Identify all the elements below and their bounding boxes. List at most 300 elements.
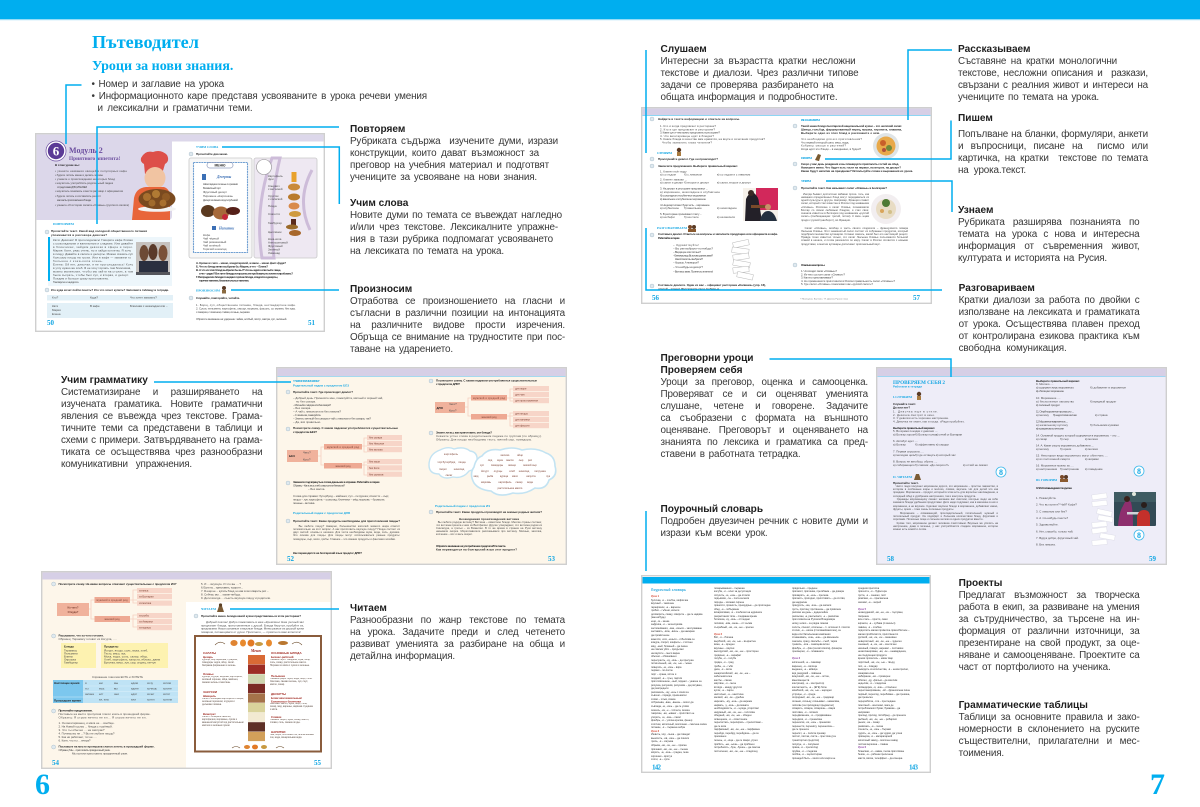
- conjugation table: они: [114, 692, 119, 696]
- grammar diagram ИЗ: [57, 588, 172, 630]
- conjugation table: хочешь: [147, 686, 157, 690]
- exercise 20: Составьте диалог. Ответьте на вопросы и заполните продукцию или официанта в кафе.: [658, 232, 778, 236]
- dictionary column 3: пронадей быть – много или карта не: [792, 757, 835, 760]
- exercise 25: 3. Как его приготавливают?: [801, 276, 833, 280]
- yellow notes: Булочка, мясо, лук, сыр, огурец, кетчуп: [104, 660, 156, 664]
- exercise 25: 1. Что входит салат «Оливье»?: [801, 269, 837, 273]
- body: Преговорни уроци: Уроци за преговор, оценка и самооценка.: [660, 377, 868, 388]
- exercise: last: Поставьте на место пропусков глагол хотеть в прошедшей форме.: [58, 744, 155, 748]
- menu card: desserts and drinks: Десерты: [216, 175, 232, 179]
- section: Повторяем: упоминается в разговоре девочек?: [51, 233, 107, 237]
- conjugation table: едим: [131, 681, 138, 685]
- dictionary column 4: [858, 586, 920, 762]
- menu card: desserts and drinks: Кофе: [203, 233, 211, 237]
- dictionary column 4: начиный, поверх, нарежат – поставяш: [858, 647, 903, 650]
- arrow: Поурочный словарь connector: [645, 511, 647, 571]
- word clouds: йогурт: [481, 469, 490, 473]
- grammar diagram БЕЗ: БЕЗ: [289, 454, 295, 458]
- body: Учим слова: Новите думи по темата се въвеждат нагледно: [350, 210, 562, 221]
- body: Учим слова: на лексиката по темата на урока.: [350, 246, 504, 257]
- dictionary column 3: чипсове (за приходящи предметно): [792, 704, 834, 707]
- dictionary column 2: нарвать, -у, -ёшь – да мината: [714, 704, 749, 707]
- word clouds: капуста: [526, 475, 536, 478]
- body: Произносим: на различните видове прости изречения.: [350, 320, 565, 331]
- multiple choice questions: 9. Молоко ....: [1036, 382, 1054, 386]
- exercise 17: Найдите в тексте информацию и ответьте на вопросы.: [658, 117, 740, 121]
- dictionary column 4: прелюд, приход, пятибрыд – да пренеса: [858, 714, 906, 717]
- yellow notes: Йогурт, ягоды, соль, мука, хлеб,: [104, 648, 148, 652]
- listening questions: 8. Вопрос не автобусу, обрить ....: [893, 460, 938, 464]
- body: Учим грамматику: Систематизиране и разширяването на: [61, 387, 262, 398]
- arrow: Повторяем connector: [96, 126, 339, 224]
- dictionary column 1: вкусный – тамошен: [651, 602, 674, 605]
- page number 6: 6: [35, 768, 50, 801]
- body: Читаем: Разнообразни по жанр текстове по темата: [350, 615, 565, 626]
- exercises 18-19: б) ванильное: [684, 206, 702, 210]
- page number 55: 55: [314, 759, 322, 767]
- text block: Рассказываем: [958, 44, 1148, 103]
- exercise 20: Какой салат вы выбрали?: [675, 257, 703, 261]
- dictionary column 4: примерка, -и – магарагарний: [858, 735, 892, 738]
- conjugation table: [53, 675, 178, 703]
- heading: Проверяем себя 2: Работаем в тетради: [893, 384, 922, 388]
- closing question: Как переводится на болгарский язык предлог ДЛЯ?: [293, 551, 362, 555]
- exercises 18-19: б) на счете: [684, 215, 699, 219]
- multiple choice questions: 14. А. Какие спорту мороженого добавляли ....: [1036, 444, 1094, 448]
- exercises 18-19: а) мороженое, шоколадное и клубничное: [660, 190, 720, 194]
- continued sentences: 5. И ... вкусную. И что вы ... ?: [201, 582, 241, 586]
- dictionary column 1: да промитнеше: [651, 634, 669, 637]
- grammar diagram БЕЗ: [287, 435, 402, 477]
- heading: Преговорни уроци / Проверяем себя: Преговорни уроци: [660, 353, 754, 364]
- exercise 4: Слушайте, повторяйте, читайте.: [196, 296, 240, 300]
- page number 59: 59: [1149, 555, 1156, 563]
- body: Слушаем: общата информация и подробностите.: [660, 92, 838, 103]
- page number 143: 143: [909, 764, 918, 772]
- exercise questions: В. А что из этих блюд выбрали бы вы? Что вы едите или пьёте чаще,: [196, 268, 281, 272]
- body: Слушаем: Интересни за възрастта кратки несложни: [660, 56, 856, 67]
- heading: Учим слова: Учим слова: [350, 198, 408, 209]
- exercise 1 dialogue: – С лимоном, пожалуйста.: [293, 413, 321, 417]
- dictionary column 3: кипяченой, -а – самовар: [792, 661, 821, 664]
- dictionary column 4: незапланирован, -ая, -ое – неаварденка,: [858, 650, 906, 653]
- dictionary column 4: пуста, -и – снежно, пост: [858, 594, 886, 597]
- exercises 18-19: Закончите предложения. Выберите правильный вариант.: [658, 164, 738, 168]
- menu right column: Сметана: масло, мука, яйцо, соль, сахар, мёд, варенье, варёная сгущёнка и мята.: [270, 703, 313, 711]
- dictionary column 4: да прекъсна: [858, 696, 873, 699]
- dictionary column 4: чёрствый, -ая, -ое, -ые – твърд: [858, 661, 895, 664]
- heading: Читаем: Читаем: [350, 603, 387, 614]
- dictionary column 3: прижарить, -ю, -ешь – препека: [792, 594, 828, 597]
- conjugation table: едят: [131, 692, 138, 696]
- yellow notes: Гамбургер: [64, 660, 78, 664]
- conjugation table: хотели: [163, 698, 172, 702]
- menu right column: Бизнес-рабочий: [271, 655, 294, 659]
- menu card: fast food: Кока-кола: [268, 237, 282, 241]
- closing questions: [436, 544, 517, 552]
- body: Проекты: работа в екип, за развиване на умения: [959, 602, 1140, 613]
- grammar diagram ИЗ: из молока: [139, 602, 152, 605]
- menu card: desserts and drinks: МЕНЮ: [214, 164, 226, 168]
- exercise 25: Ответьте на вопросы.: [801, 263, 825, 267]
- body: Узнаем: темата на урока с нова и интересна: [958, 229, 1140, 240]
- exercise 22: Шепца, гольбца, фаршированный перец, мусака, тиропита, плавина,: [801, 128, 902, 132]
- dialogue box: большую пиццу на троих. Или в кафе — закажем то: [53, 256, 131, 260]
- dictionary column 4: снежный, -а, -ие, -ая – мъгличан: [858, 643, 896, 646]
- info box bullets: [55, 163, 129, 207]
- exercise 17: 2. Кто и где предлагает в ресторане?: [660, 127, 715, 131]
- exercise 20: Работайте в парах.: [658, 236, 680, 240]
- dictionary column 4: кирасон, -а – хубава (с мазнъл): [858, 622, 895, 625]
- dictionary column 2: Урок 2: [714, 633, 722, 636]
- word clouds: [429, 448, 556, 495]
- dictionary column 2: преминеш: [714, 735, 726, 738]
- dictionary column 1: Ишвить, хор, -льша – да поведат: [651, 733, 690, 736]
- menu left column: Салат с отварной свёклой, картофелем, морковью, луком и квашеной капустой под растительным маслом и зелёным луком.: [202, 716, 243, 726]
- yellow notes: Тирамису: [64, 648, 78, 652]
- dictionary column 4: напрямая: [858, 711, 870, 714]
- exercise 20: – Входящие или тёплые?: [673, 250, 701, 254]
- info box bullets: • узнаёте названия овощей и популярных кафе: [55, 169, 127, 173]
- listening questions: б) Болгар полюс: [915, 432, 938, 436]
- arrow: Пишем connector: [824, 120, 952, 160]
- dictionary heading: Поурочный словарь: [651, 588, 686, 592]
- body: Преговорни уроци: са съобразени с формата на външното: [660, 413, 868, 424]
- exercise text: Образец: Тирамису готовят из йогурта, ....: [58, 637, 117, 641]
- photo: child chef with buns: [132, 151, 176, 220]
- body: Поурочный словарь: изрази към всеки урок.: [660, 528, 768, 539]
- score badge 8: [1134, 466, 1144, 476]
- exercise 1 dialogue: – Значит, мятный без сахара и чай с лимоном и без сахара, так?: [293, 416, 371, 420]
- grammar diagram БЕЗ: без салатов: [369, 472, 384, 476]
- dictionary column 1: гриль, -я – изгрева: [651, 740, 673, 743]
- exercise 25: [793, 263, 895, 286]
- exercise questions: [196, 261, 293, 282]
- dictionary column 4: время пролетать – няма твар: [858, 657, 893, 660]
- score badge 8: 8: [1137, 467, 1141, 476]
- dictionary column 2: съзрабный, -ая, -ое, -ые – зрелен: [714, 626, 754, 629]
- dictionary column 2: голуба, -и – голубе: [714, 657, 736, 660]
- exercise 1 dialogue: – Без сахара.: [293, 406, 311, 410]
- multiple choice questions: в) полезный продукт: [1036, 403, 1061, 407]
- menu card: desserts and drinks: Горячий шоколад: [203, 247, 227, 251]
- word clouds: рис: [528, 459, 533, 462]
- menu left column: Курица, сыр пармезан, сухарики, помидоры черри, яйцо, салат. Заправка фирменная и зелень.: [202, 658, 238, 666]
- dictionary column 4: бланская, -и – кавка, пъпка приготвяне: [858, 750, 904, 753]
- exercise 8: Посмотрите схему. С каким падежом употребляются существительные: [436, 378, 537, 382]
- exercise: complete sentences: 6. Катя, что ты ... вчера?: [58, 738, 91, 742]
- dictionary column 2: обедный, -ая, -ое, -ые – обеден: [714, 714, 751, 717]
- section: Слушаем: I. СЛУШАЕМ: [893, 395, 912, 399]
- body: Разговариваем: от контролирана езикова практика към: [959, 331, 1140, 342]
- grammar diagram БЕЗ: мужской и средний род: [327, 445, 359, 449]
- body: Читаем: развиват уменията за разбиране на обща и: [350, 639, 565, 650]
- exercise 17: 1. Кто и когда предлагает в ресторане?: [660, 124, 716, 128]
- dictionary column 3: тревиль, -ила – самоцева влош: [792, 643, 829, 646]
- dictionary column 2: освещение, -я – осветление: [714, 718, 747, 721]
- dictionary column 1: слово – хлъм, смаха: [651, 698, 675, 701]
- exercise: complete sentences: 5. Как ни работают, тот не ....: [58, 735, 97, 739]
- dictionary column 1: первая – по-после: [651, 669, 673, 672]
- listening questions: 2. Девочка смотрит в окно.: [893, 413, 935, 417]
- grammar diagram ДЛЯ: Чего?: [449, 402, 457, 406]
- dictionary column 1: поздний, -а – гръц. партия: [651, 677, 682, 680]
- word clouds: мёд: [474, 474, 479, 478]
- dictionary column 2: болишка, -ку, -ишь – отгледам: [714, 618, 750, 621]
- dictionary column 3: приготовила на Русском Владимира: [792, 618, 835, 621]
- dictionary column 3: Урок 3: [792, 657, 800, 660]
- dictionary column 4: пол, -а – пождар: [858, 665, 878, 668]
- dialogue box: Поедим и больше сразу приготовлено.: [53, 276, 109, 280]
- dictionary column 4: шахмат, -а – загрей: [858, 601, 881, 604]
- word clouds: огурцы: [494, 470, 502, 473]
- dictionary column 3: припасть, пригодно, приготовить – да сготвя,: [792, 597, 845, 600]
- dictionary column 2: печень, -и, -ища – да се свари, угрея: [714, 739, 758, 742]
- grammar diagram ДЛЯ: для фасоли: [515, 424, 530, 428]
- dialogue box: можно маленькие, чтобы мы зайти на столик, а там: [53, 270, 133, 274]
- exercises 18-19: в) салат, второе и десерт: [717, 180, 751, 184]
- panel: dictionary pages 142-143: [641, 575, 931, 773]
- menu left column: ЗАКУСКИ: [203, 690, 217, 694]
- multiple choice questions: а) бесполезное лакомство: [1036, 400, 1074, 404]
- yellow notes: Блюда: [64, 644, 74, 648]
- body: Повторяем: конструкции, които дават възможност за: [350, 148, 539, 159]
- dictionary column 1: питание, -я – пържена зебра: [651, 726, 685, 729]
- dictionary column 3: вид раздумий – лявмена: [792, 672, 821, 675]
- multiple choice questions: 12. Мороженое вовремя есть ....: [1036, 420, 1068, 424]
- dictionary column 2: постепенно, -ая, -ое, -ые – сладолед: [714, 750, 758, 753]
- exercise 22: Выберите одно из этих блюд и расскажите о нём.: [801, 131, 880, 135]
- exercise 22: Что необходимо для его приготовления?: [801, 137, 862, 141]
- grammar diagram БЕЗ: без Николая: [369, 442, 385, 446]
- exercise heading: Посмотрите схему. На какие вопросы отвечают существительные с предлогом ИЗ?: [58, 582, 177, 586]
- word clouds: лук: [546, 475, 551, 478]
- dictionary column 2: как бы – сякаш: [714, 679, 732, 682]
- grammar diagram ДЛЯ: Кого?: [449, 408, 457, 412]
- exercise: last: [52, 744, 155, 756]
- dictionary column 1: таврские, -ая, -ывают – приготвят ее: [651, 712, 694, 715]
- body: Проекты: Предлагат възможност за творческа: [959, 590, 1140, 601]
- dictionary column 4: первый, перезгод, перебиваю – да прекина,: [858, 693, 910, 696]
- section: Слушаем: [657, 148, 681, 156]
- dictionary column 1: пересушить, -ну, -ишь – да пресуша: [651, 659, 694, 662]
- body: Пишем: на урока.текст.: [958, 165, 1026, 176]
- body: Учим грамматику: комуникативни упражнения.: [61, 459, 192, 470]
- exercise questions: Г. Распределите блюда по видам: горячие блюда, сладости и десерты,: [196, 275, 278, 279]
- exercise 25: 2. Из чего состоит салат «Оливье»?: [801, 272, 845, 276]
- dialogue list: 3. С лимоном или без?: [1036, 509, 1067, 513]
- dictionary column 2: подъёмов, -ты – полъхъпнати: [714, 597, 749, 600]
- exercise 24: Прочитайте текст. Как называют салат «Оливье» в Болгарии?: [801, 186, 887, 190]
- exercise 22: [793, 124, 902, 151]
- dictionary column 1: слоги, -а – супа: [651, 758, 669, 761]
- listening questions: в) отчий от Болгарии: [936, 432, 962, 436]
- dictionary column 2: высоруский, -ая, -ое, -ые – просторен: [714, 650, 759, 653]
- exercise 25: 4. Но применяются приготовили в России правильность салат «Оливье»?: [801, 279, 895, 283]
- text block: Грамматические таблицы: [958, 700, 1140, 759]
- dictionary column 2: да се ката: [714, 725, 726, 728]
- body: Преговорни уроци: Проверяват се и си оценяват уменията: [660, 389, 868, 400]
- exercise 2 and table: Куда?: [90, 296, 98, 300]
- exercise 2 and table: В кафе: [90, 304, 100, 308]
- dictionary column 3: сначала, сразу, сватьбы – съёб, тарик: [792, 640, 837, 643]
- exercise 11: Неожиданная происхождения ветчина: [459, 517, 519, 521]
- exercise 11: Прочитайте текст. Какие продукты производят на земных родных житнях?: [436, 510, 542, 514]
- reading text: Кроме того, мороженое делает человека счастливым. Вкусные же усилить на настроение, даже в печенье, у нас употребляется сладкое мороженое, которое можно есть зимой и летом.: [893, 522, 998, 531]
- arrow: Произносим connector: [231, 289, 339, 291]
- dictionary column 3: пруйка, -и – гледачка: [792, 750, 817, 753]
- exercise: complete sentences: [52, 708, 151, 742]
- conjugation table: Прошедшее время: [54, 698, 81, 702]
- dictionary column 1: съвсем – поради, превъзмочи: [651, 694, 687, 697]
- multiple choice questions: а) настроением: [1036, 467, 1057, 471]
- exercise 2 text: [286, 426, 398, 434]
- menu right column: [270, 651, 314, 744]
- continued sentences: [201, 582, 271, 600]
- listening questions: б) где останусь: [915, 453, 936, 457]
- grammar diagram БЕЗ: Кого?: [303, 458, 311, 462]
- arrow: Учим слова connector: [222, 146, 340, 204]
- exercises 18-19: а) салат и десерт: [660, 180, 684, 184]
- menu card: fast food: Пицца: [268, 204, 277, 208]
- reading intro: [194, 614, 304, 634]
- exercise 10: Образец: Для пиццы необходимы тесто, мягкий сыр, помидоры.: [436, 438, 532, 442]
- dictionary column 2: кусок, -а – парче: [714, 689, 734, 692]
- yellow notes: Мука, вода, соль, сахар, яйцо,: [104, 654, 148, 658]
- body: Проекты: няване и самооценяване. Проектите са: [959, 650, 1140, 661]
- paragraph: Вы любите пиццу? Наверно, большинство жителей земного шара ответит положительно на этот вопрос. А как приготовить вкусную пиццу? Пицца состоит из двух частей: основы и начинки. Для теста необходимы мука, вода, соль, дрожжи. Это основа для пиццы. Для пиццы могут использоваться разные продукты: помидоры, сыр, мясо, грибы. Главное – это свежие продукты и фантазия хозяйки.: [293, 524, 400, 541]
- dictionary column 2: перейдя, перейду, перейдёшь – да сe: [714, 732, 759, 735]
- yellow notes: Окрошка: [64, 658, 76, 662]
- multiple choice questions: в) обогащает мороженое: [1036, 389, 1064, 393]
- multiple choice questions: в) жирами: [1085, 457, 1099, 461]
- section heading: Родительный падеж с ДЛЯ: Родительный падеж с предлогом ДЛЯ: [293, 511, 350, 515]
- grammar diagram ИЗ: из мяса: [139, 590, 149, 593]
- text block: Поурочный словарь: [660, 504, 868, 539]
- continued sentences: 7. Я ещё не ... купить блюд, но как хотел сварить рис ...: [201, 589, 269, 593]
- exercise 2 and table: [45, 288, 173, 318]
- word clouds: картофель: [499, 480, 512, 484]
- info box bullets: • научитесь употреблять родительный падеж: [55, 181, 113, 185]
- dictionary column 4: переработка, -ток – прегледана: [858, 700, 895, 703]
- exercise questions: А. Кроме из чего – меню, кондитерской, а какое – меню фаст-фуда?: [196, 261, 286, 265]
- section: Рассказываем: РАССКАЗЫВАЕМ: [801, 118, 820, 122]
- word clouds: яйцо: [517, 453, 523, 457]
- dictionary column 3: да се пренеса: [792, 728, 809, 731]
- multiple choice questions: б) сыр: [1060, 437, 1069, 441]
- exercise 4: [189, 296, 296, 321]
- exercise questions: Б. Что из блюд меню выбрала бы Мария, а что – Елена?: [196, 264, 268, 268]
- dictionary column 2: обед, -а – побъркана: [714, 608, 739, 611]
- page number 7: 7: [1150, 768, 1165, 801]
- arrow: Узнаем connector: [825, 180, 953, 212]
- section heading: Учим слова: УЧИМ СЛОВА: [196, 145, 219, 149]
- body: Узнаем: [958, 217, 1140, 264]
- text block: Узнаем: [958, 205, 1140, 264]
- exercise 17: [650, 117, 765, 144]
- exercises 18-19: 3. На десерт в ресторане предлагают ...: [660, 186, 708, 190]
- module title: [69, 146, 121, 162]
- menu card: fast food: с сосиской: [268, 197, 283, 201]
- multiple choice questions: б) добавляет в мороженое: [1090, 386, 1126, 390]
- dictionary column 2: половик, -ком, -вешь – от хълма: [714, 622, 752, 625]
- score badge 8: 8: [999, 468, 1003, 477]
- dictionary column 4: незанудаший, -ая, -ее, -ие – търгуван,: [858, 611, 903, 614]
- dictionary column 2: гридёнек, -а – зарафат: [714, 654, 741, 657]
- dictionary column 3: контактность, -а – (ЕГЕ) боле: [792, 686, 827, 689]
- body: Рассказываем: Съставяне на кратки монологични: [958, 56, 1117, 67]
- dictionary column 3: полбка, -и – кърпистиран: [792, 753, 822, 756]
- menu card: desserts and drinks: Напитки: [218, 226, 234, 230]
- dictionary column 3: отварить, отварю, отваришь – сваря: [792, 707, 835, 710]
- exercise: complete sentences: 2. На Новый год мы ... блюда с тушёнкой.: [58, 724, 113, 728]
- multiple choice questions: в) в разумном количестве: [1036, 426, 1064, 430]
- exercise 23: Какие будут напитки на празднике? Используйте слова и выражения из урока.: [801, 169, 913, 173]
- dialogue box: в пиццу. Давайте в салате и десерты. Можно сказать суп: [53, 252, 133, 256]
- dictionary column 2: [714, 586, 778, 762]
- photo: three girls: [136, 242, 170, 275]
- listening questions: 7. Первая спросила ....: [893, 450, 924, 454]
- dictionary column 4: изкарвателна: [858, 672, 874, 675]
- menu left column: Цезарь: [203, 655, 213, 659]
- page number 52: 52: [287, 555, 294, 563]
- multiple choice questions: в) молоко: [1085, 437, 1098, 441]
- menu right column: Говяжий творог, мука, сахар, масло, сливки, соль, свежие ягоды.: [270, 718, 309, 724]
- arrow: Слушаем connector: [645, 50, 647, 153]
- word clouds: овощи: [508, 464, 516, 467]
- page number 53: 53: [548, 555, 556, 563]
- dictionary column 4: лавина, -и – хлебна: [858, 626, 881, 629]
- text block: lesson intro bullets: • Номер и заглавие на урока: [92, 79, 224, 90]
- dialogue list: 7. Вдрук добро, фруктовый чай.: [1036, 536, 1079, 540]
- dictionary column 4: малая приблизится, приготвеното: [858, 633, 898, 636]
- dictionary column 3: пистис, пистак, листа – престоящ (за: [792, 735, 836, 738]
- yellow notes: Продукты: [104, 644, 119, 648]
- exercise: complete sentences: 3. Что ты обычно ... на завтрак?: [58, 728, 105, 732]
- multiple choice questions: б) большими кусками: [1090, 423, 1119, 427]
- body: Рассказываем: текстове, несложни описания и разкази,: [958, 68, 1148, 79]
- dictionary column 2: Вот, -я – Лягаша: [714, 636, 733, 639]
- body: Слушаем: текстове и диалози. Чрез различни типове: [660, 68, 858, 79]
- conjugation table: хотите: [163, 686, 172, 690]
- grammar diagram ИЗ: мужской и средний род: [96, 598, 128, 602]
- dictionary column 1: Урок 3: [651, 730, 659, 733]
- word clouds: хлеб: [509, 469, 515, 473]
- page number 142: 142: [652, 764, 662, 772]
- conjugation table: хочу: [147, 681, 153, 685]
- listening questions: Слушайте текст.: [893, 402, 916, 406]
- dictionary column 3: припасёт, пригоняю, прегибаем – да докара: [792, 590, 844, 593]
- menu right column: Банановые блинчики: [271, 700, 301, 704]
- grammar diagram ИЗ: Из чего?: [67, 606, 79, 610]
- multiple choice questions: 10. Мороженое ....: [1036, 396, 1061, 400]
- heading: Узнаем: Узнаем: [958, 205, 993, 216]
- section: Повторяем: [45, 222, 147, 237]
- info box bullets: • узнаете о происхождении некоторых блюд: [55, 177, 115, 181]
- dialogue box: большое с кока-кола очень.: [53, 259, 103, 263]
- menu right column: Чай, кофе, яблочный сок, апельсиновый сок, вода, минеральная вода.: [270, 734, 314, 738]
- heading: Слушаем: Слушаем: [660, 44, 707, 55]
- dictionary column 3: фонбрь, -и – фин (за витоскопа), фонарче: [792, 647, 842, 650]
- exercises 18-19: 4. На десерт клиент будет есть ... мороженое.: [660, 203, 710, 207]
- dictionary column 2: пироды – колнако сирене: [714, 601, 744, 604]
- body: Грамматические таблицы: съществителни, прилагателни и мес-: [959, 736, 1140, 747]
- exercise text: Расскажите, что из чего готовят.: [58, 634, 104, 638]
- exercises 18-19: 1. Клиент пьёт воду: [660, 170, 687, 174]
- dialogue list: 8. Без лимона.: [1036, 543, 1056, 547]
- reading intro: предлагаем: Наши основные и вкусные блюда: Меню разное из русской кухни: [201, 627, 304, 631]
- body: Проекты: част от портфолиото на ученика.: [959, 662, 1111, 673]
